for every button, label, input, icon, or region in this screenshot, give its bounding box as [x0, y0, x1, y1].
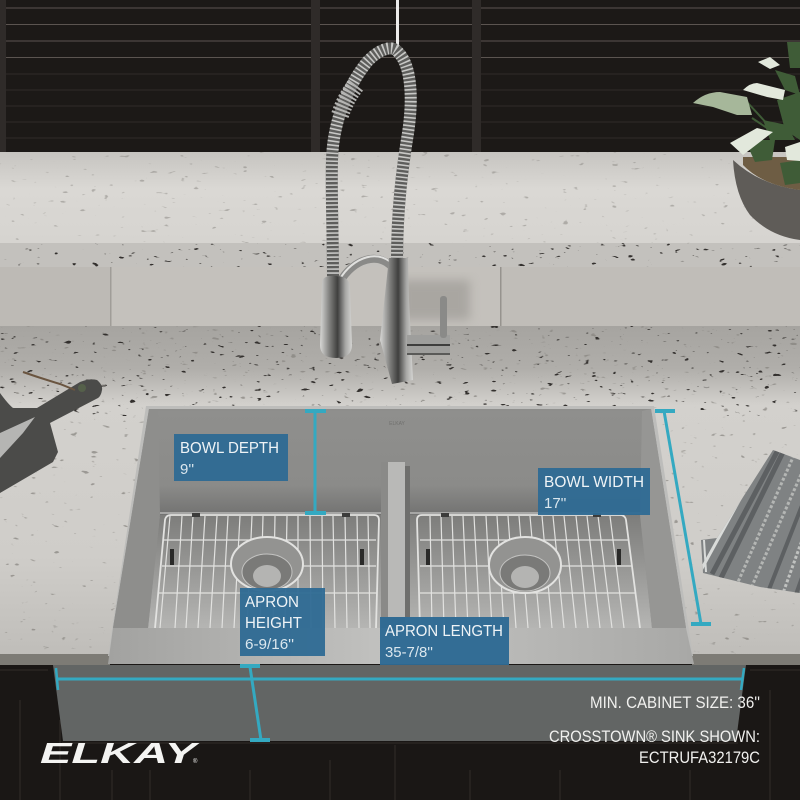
- text: minimum cabinet size: MIN. CABINET SIZE: 36'': [590, 694, 760, 712]
- label: bowl width: BOWL WIDTH: [544, 474, 644, 491]
- counter front edge: [0, 654, 800, 666]
- dimension line: apron height: [240, 666, 270, 740]
- label: apron length: APRON LENGTH: [385, 623, 503, 640]
- right bowl rack and drain: [417, 513, 640, 628]
- logo: Elkay: ELKAY: [40, 738, 200, 770]
- dimension line: bowl depth: [305, 411, 326, 513]
- text: sink model shown: CROSSTOWN® SINK SHOWN:: [549, 728, 760, 746]
- cutting board and knife: [0, 372, 102, 493]
- backsplash tile: [0, 267, 800, 327]
- label: bowl depth: [174, 434, 288, 481]
- label: apron height: APRON: [245, 594, 299, 611]
- folded towel: [700, 448, 800, 600]
- dark slat wall: [0, 0, 800, 153]
- stainless sink basin: ELKAY: [389, 421, 406, 427]
- sink divider: [381, 462, 410, 617]
- label: bowl width: 17'': [544, 495, 567, 512]
- left bowl rack and drain: [155, 513, 379, 628]
- dimension line: bowl width: [655, 411, 711, 624]
- label: bowl depth: BOWL DEPTH: [180, 440, 279, 457]
- back counter ledge: [0, 152, 800, 268]
- label: bowl depth: 9'': [180, 461, 194, 478]
- faucet: [320, 48, 450, 384]
- main counter top: [0, 326, 800, 656]
- label: apron height: 6-9/16'': [245, 636, 294, 653]
- label: apron height: HEIGHT: [245, 615, 303, 632]
- text: sink model shown: [549, 728, 760, 767]
- label: bowl width: [538, 468, 650, 515]
- dimension line: minimum cabinet size: [56, 668, 744, 690]
- label: apron length: 35-7/8'': [385, 644, 433, 661]
- stainless sink basin: [108, 406, 693, 656]
- sink apron lip: [108, 628, 694, 664]
- label: apron height: [240, 588, 325, 656]
- logo: Elkay: ®: [193, 758, 198, 765]
- text: sink model shown: ECTRUFA32179C: [639, 749, 760, 767]
- logo: Elkay: [40, 738, 200, 770]
- apron front face: [53, 665, 746, 741]
- label: apron length: [380, 617, 509, 665]
- planter with herb plant: [693, 42, 800, 240]
- lower cabinets: [0, 665, 800, 800]
